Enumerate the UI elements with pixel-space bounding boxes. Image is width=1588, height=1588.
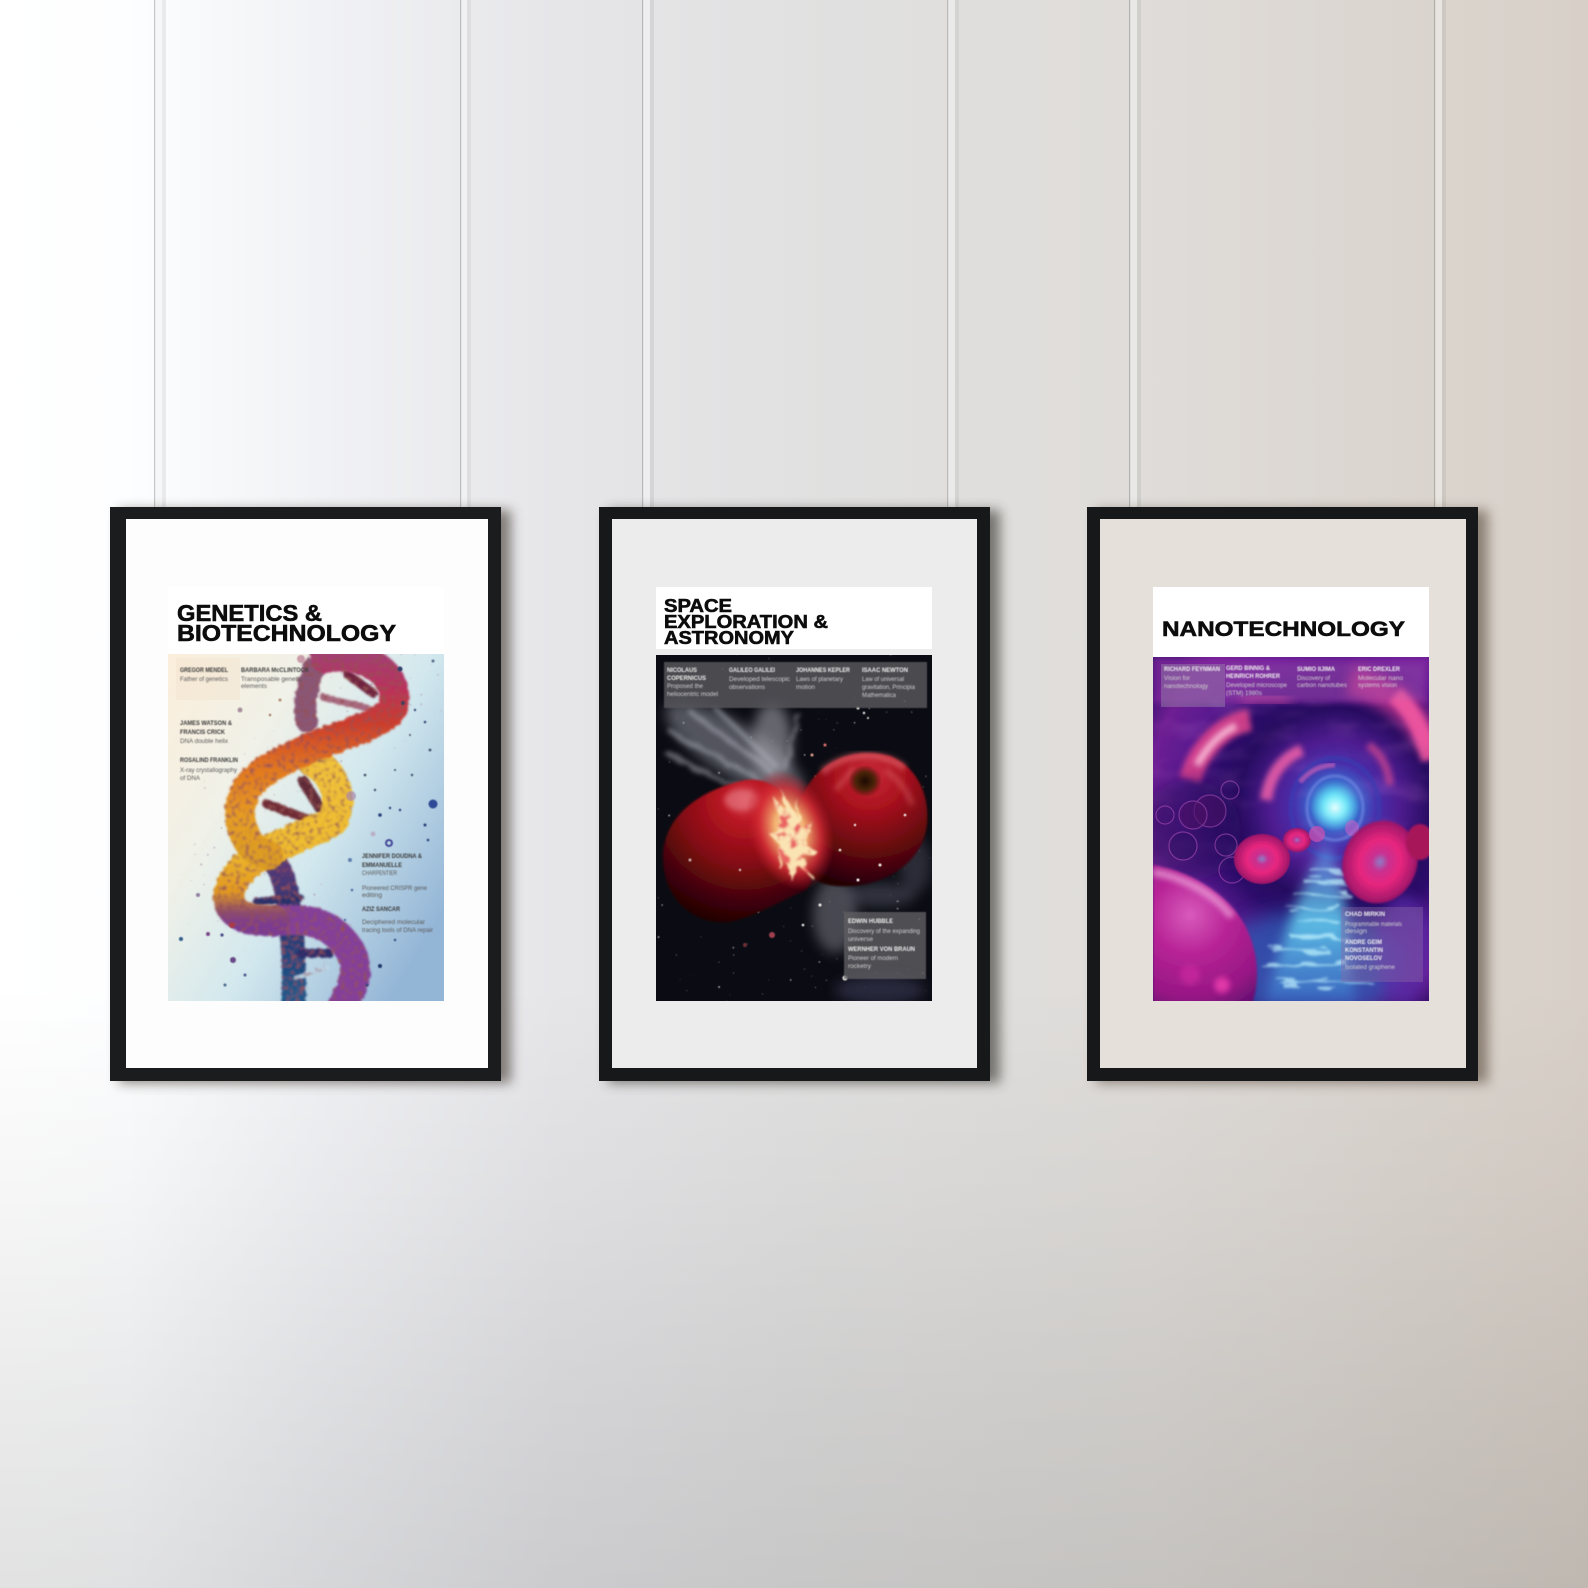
top milestones panel: Vision for: [1164, 676, 1190, 682]
poster title block: SPACE: [664, 595, 732, 616]
poster title block: ASTRONOMY: [664, 627, 795, 648]
beige mat: [1100, 519, 1466, 1068]
lower milestones panel: [1341, 907, 1423, 982]
lower milestones panel: design: [1345, 929, 1367, 935]
top milestones panel: Developed microscope: [1226, 683, 1288, 689]
apple highlight: [724, 789, 760, 811]
milestone text: top left: FRANCIS CRICK: [180, 730, 226, 736]
apple rim light: [822, 756, 905, 772]
flowing cyan stream: [1262, 845, 1432, 1005]
top milestones panel: ISAAC NEWTON: [862, 668, 908, 674]
black frame: [1087, 507, 1478, 1081]
poster frame: nanotechnology: [1087, 507, 1488, 1083]
top milestones panel: motion: [796, 685, 815, 691]
top milestones panel: gravitation, Principia: [862, 685, 916, 691]
frame shadow: [608, 510, 1000, 1083]
lower milestones panel: universe: [848, 937, 874, 943]
red to orange strand: [240, 657, 394, 855]
top milestones panel: Law of universal: [862, 677, 904, 683]
top milestones panel: JOHANNES KEPLER: [796, 668, 851, 674]
lower milestones panel: ANDRE GEIM: [1345, 940, 1382, 946]
milestone text: lower right: AZIZ SANCAR: [362, 907, 401, 913]
milestone text: top left: X-ray crystallography: [180, 768, 237, 774]
blood vessel tunnel artwork: [1140, 657, 1434, 1020]
top milestones panel: heliocentric model: [667, 692, 718, 698]
dark lower left shade: [1140, 780, 1240, 880]
lower blue glow: [1215, 910, 1405, 1020]
milestone text: lower right: Deciphered molecular: [362, 920, 425, 926]
back strands and rungs: [257, 668, 373, 1010]
apple stem cavity: [848, 765, 882, 797]
black frame: [110, 507, 501, 1081]
lower milestones panel: Programmable materials: [1345, 922, 1402, 928]
left apple half: [663, 780, 812, 922]
tunnel rings: [1190, 695, 1430, 858]
top milestones panel: SUMIO IIJIMA: [1297, 667, 1336, 673]
milestone text: top left: of DNA: [180, 776, 200, 782]
yellow to purple strand: [229, 762, 355, 1010]
poster title block: BIOTECHNOLOGY: [177, 620, 396, 646]
top milestones panel: Laws of planetary: [796, 677, 843, 683]
milestone text: lower right: Pioneered CRISPR gene: [362, 886, 428, 892]
frame shadow: [1096, 510, 1488, 1083]
top milestones panel: NICOLAUS: [667, 668, 697, 674]
top milestones panel: Mathematica: [862, 693, 897, 699]
top milestones panel: Developed telescopic: [729, 677, 790, 683]
exploding apple artwork: [653, 655, 932, 1004]
tissue texture: [1153, 700, 1429, 870]
milestone text: top left: ROSALIND FRANKLIN: [180, 758, 238, 764]
milestone text: top left: elements: [241, 684, 267, 690]
milestone text: lower right: tracing tools of DNA repair: [362, 928, 433, 934]
poster title block: NANOTECHNOLOGY: [1162, 617, 1405, 641]
top milestones panel: RICHARD FEYNMAN: [1164, 667, 1220, 673]
apple streak light: [835, 768, 912, 805]
bubbles: [1156, 781, 1245, 883]
large magenta cell: [1153, 865, 1257, 1010]
frame shadow: [119, 510, 511, 1083]
top milestones panel: ERIC DREXLER: [1358, 667, 1401, 673]
top milestones panel: HEINRICH ROHRER: [1226, 674, 1281, 680]
top milestones panel: carbon nanotubes: [1297, 683, 1347, 689]
top milestones panel: (STM) 1980s: [1226, 691, 1262, 697]
milestone text: top left: GREGOR MENDEL: [180, 668, 228, 674]
star field: [656, 655, 932, 1001]
top milestones panel: nanotechnology: [1164, 684, 1208, 690]
tunnel glow: [1311, 784, 1359, 832]
lower milestones panel: [844, 912, 926, 979]
milestone text: top left: Transposable genetic: [241, 677, 302, 683]
lower milestones panel: Isolated graphene: [1345, 965, 1396, 971]
poster frame: genetics and biotechnology: [110, 507, 511, 1083]
hanging rods: [154, 0, 1446, 508]
milestone text: top left: JAMES WATSON &: [180, 721, 233, 727]
grey mat: [612, 519, 977, 1068]
milestone text: lower right: EMMANUELLE: [362, 863, 402, 869]
lower milestones panel: WERNHER VON BRAUN: [848, 947, 915, 953]
DNA helix artwork: [168, 654, 444, 1010]
poster title block: [1153, 587, 1429, 657]
lower milestones panel: KONSTANTIN: [1345, 948, 1383, 954]
explosion burst: [731, 758, 849, 902]
black frame: [599, 507, 990, 1081]
lower milestones panel: Pioneer of modern: [848, 956, 898, 962]
large donut cell: [1330, 809, 1434, 915]
scattered particles: [179, 655, 438, 986]
right apple half: [798, 753, 927, 886]
top milestones panel: GERD BINNIG &: [1226, 666, 1271, 672]
fine dust around helix: [190, 654, 442, 995]
poster title block: [656, 587, 932, 649]
poster title block: [168, 587, 444, 654]
lower milestones panel: NOVOSELOV: [1345, 956, 1382, 962]
milestone text: top left: BARBARA McCLINTOCK: [241, 668, 310, 674]
upper magenta band: [1153, 657, 1432, 745]
lower milestones panel: Discovery of the expanding: [848, 929, 920, 935]
smoke clouds: [653, 686, 931, 1004]
poster frame: space exploration and astronomy: [599, 507, 1000, 1083]
milestone text: top left: Father of genetics: [180, 677, 228, 683]
lower milestones panel: EDWIN HUBBLE: [848, 919, 893, 925]
milestone text: top left: DNA double helix: [180, 739, 228, 745]
milestone text: top left: [180, 668, 310, 782]
milestone text: lower right: JENNIFER DOUDNA &: [362, 854, 423, 860]
milestone text: lower right: editing: [362, 893, 382, 899]
lower milestones panel: rocketry: [848, 964, 871, 970]
poster title block: EXPLORATION &: [664, 611, 828, 632]
top milestones panel: Proposed the: [667, 684, 704, 690]
poster title block: GENETICS &: [177, 600, 322, 626]
lower milestones panel: CHAD MIRKIN: [1345, 912, 1385, 918]
top milestones panel: Discovery of: [1297, 676, 1330, 682]
top milestones panel: systems vision: [1358, 683, 1397, 689]
top milestones panel: [1161, 664, 1423, 707]
top milestones panel: Molecular nano: [1358, 676, 1404, 682]
bright particles: [688, 706, 906, 980]
top milestones panel: observations: [729, 685, 765, 691]
milestone text: lower right: CHARPENTIER: [362, 871, 398, 877]
top milestones panel: GALILEO GALILEI: [729, 668, 775, 674]
small donut cells: [1234, 820, 1359, 884]
top milestones panel: COPERNICUS: [667, 676, 706, 682]
top milestones panel: [664, 662, 927, 708]
white mat: [126, 519, 488, 1068]
milestone text: lower right: [362, 854, 433, 934]
